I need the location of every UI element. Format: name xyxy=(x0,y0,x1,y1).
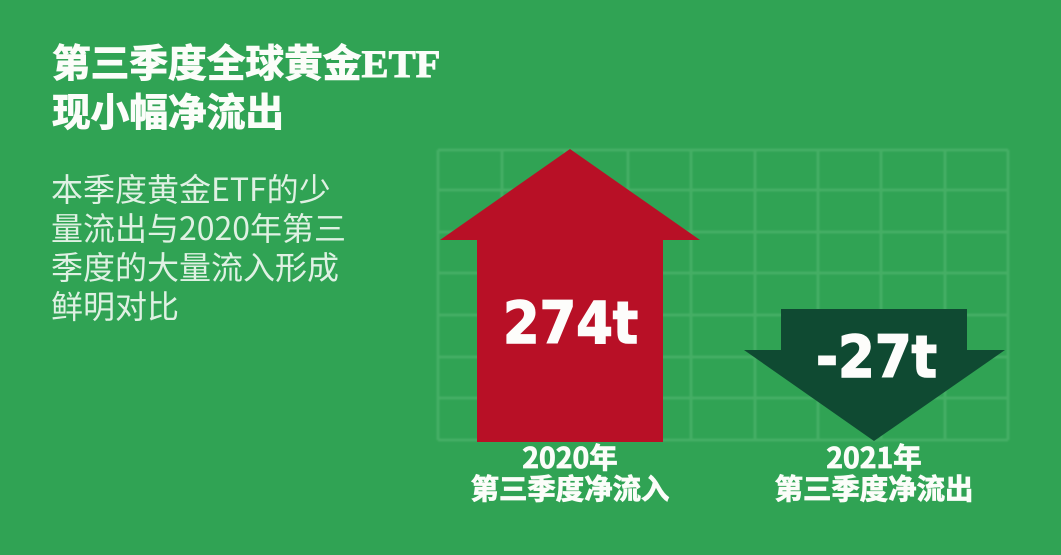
label: 2021 net outflow: 2021年 xyxy=(826,436,922,477)
title: 现小幅净流出 xyxy=(52,82,284,138)
value: -27t: -27t xyxy=(816,323,937,391)
label: 2020 net inflow: 第三季度净流入 xyxy=(471,467,669,508)
value: 274t: 274t xyxy=(503,289,638,357)
body text: 鲜明对比 xyxy=(51,282,179,328)
up arrow: 2020 net inflow xyxy=(440,149,700,442)
label: 2020 net inflow: 2020年 xyxy=(522,436,618,477)
down arrow: 2021 net outflow xyxy=(744,309,1005,441)
body text: 季度的大量流入形成 xyxy=(51,243,339,289)
body text: 本季度黄金ETF的少 xyxy=(51,165,331,211)
label: 2021 net outflow: 第三季度净流出 xyxy=(775,467,973,508)
title: 第三季度全球黄金ETF xyxy=(52,33,437,89)
body text: 量流出与2020年第三 xyxy=(51,204,346,250)
